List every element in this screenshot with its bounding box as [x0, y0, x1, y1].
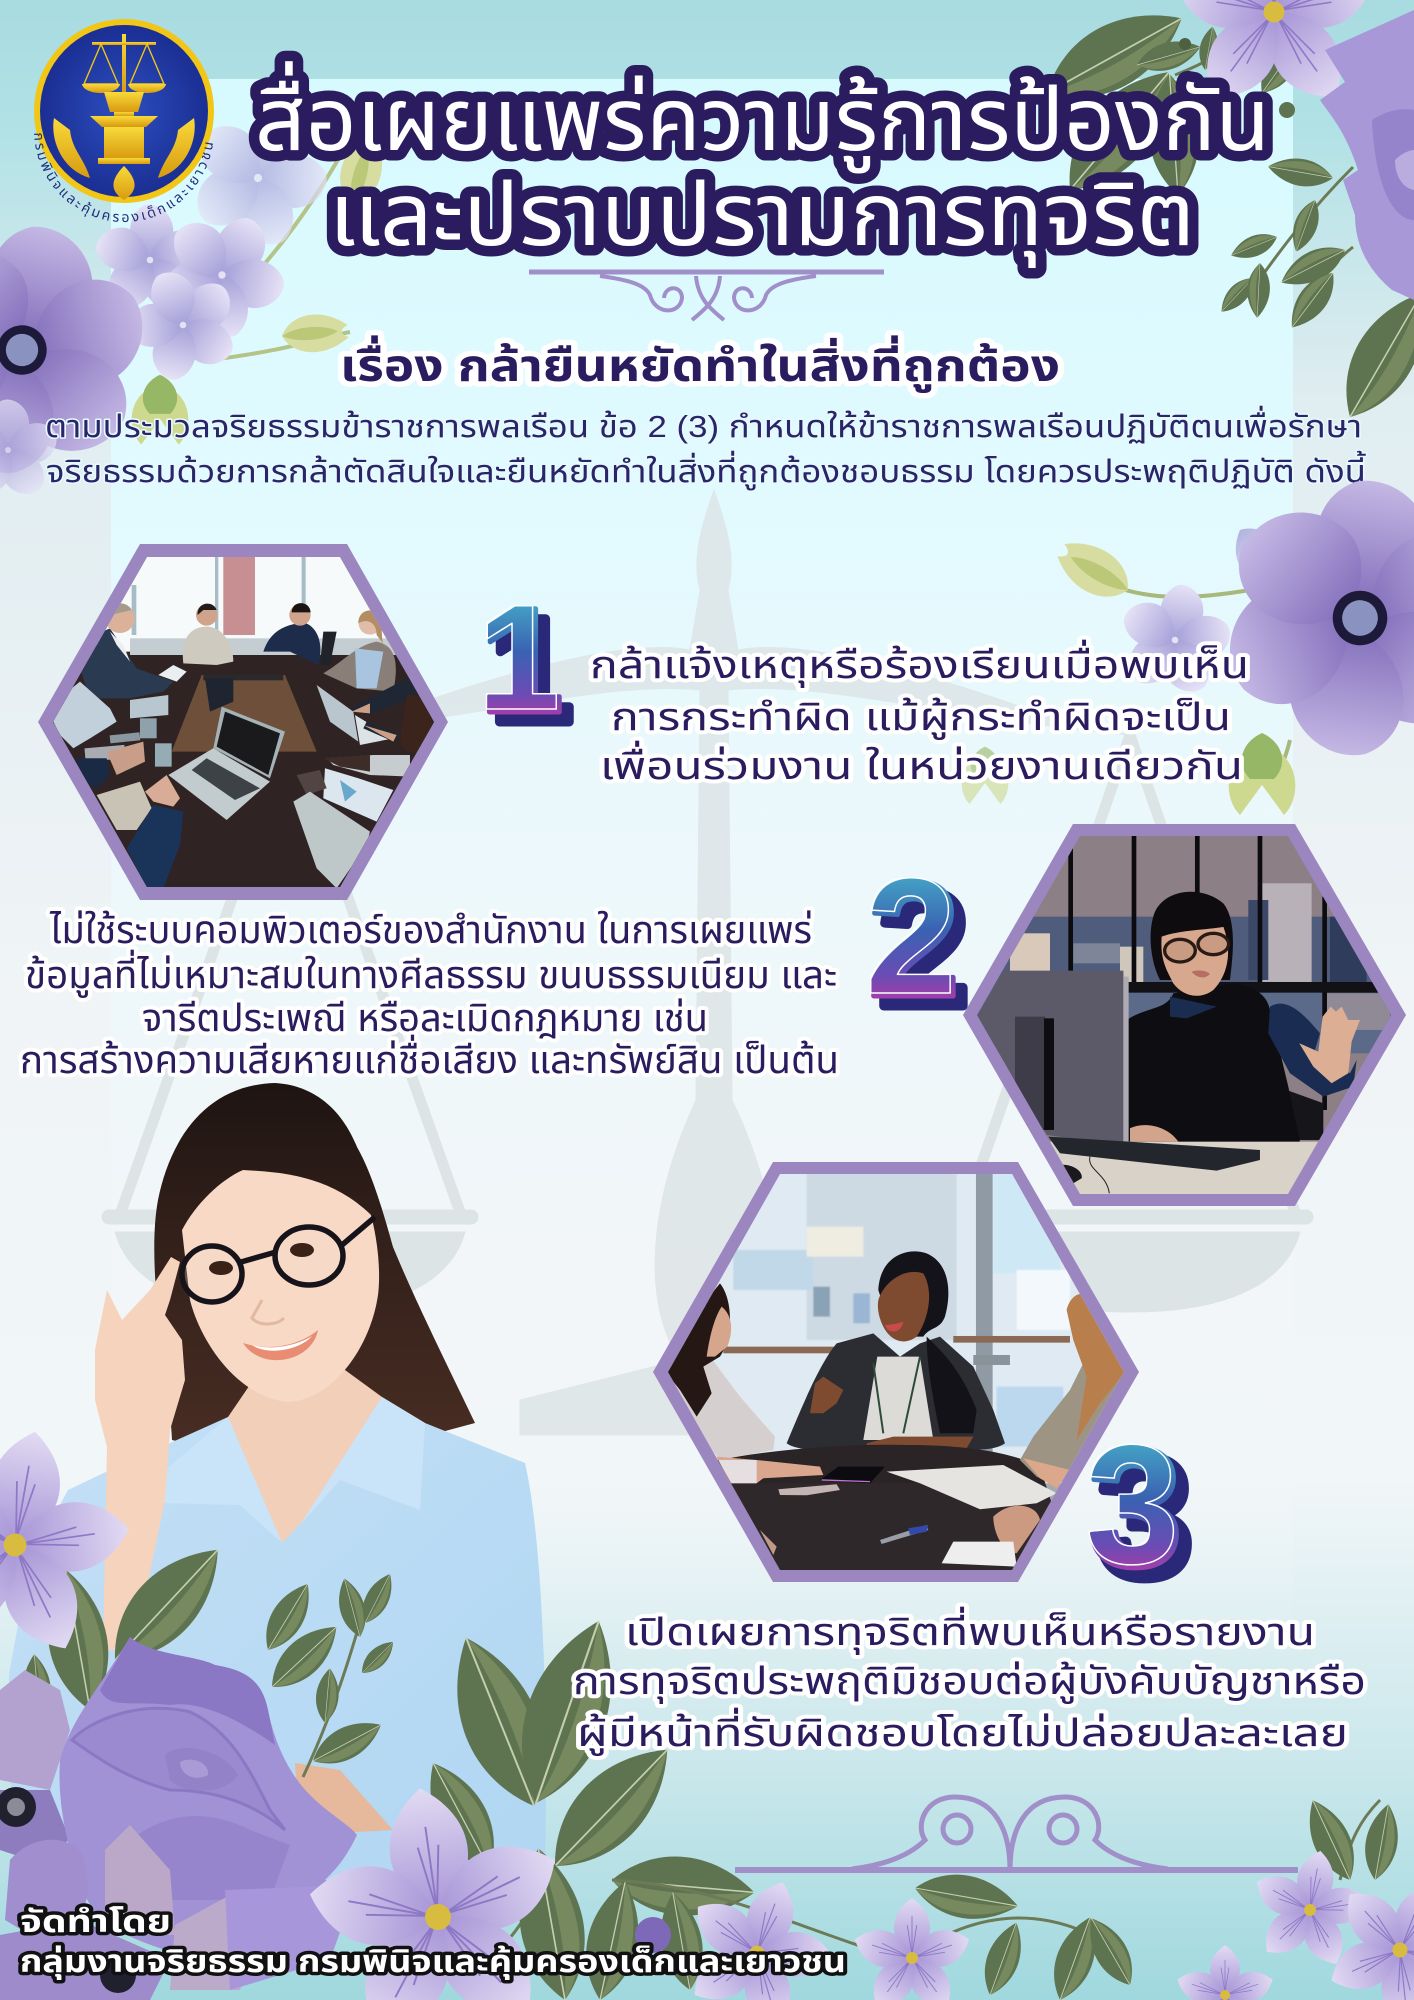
shirt collar [162, 1417, 282, 1543]
text block 2: ไม่ใช้ระบบคอมพิวเตอร์ของสำนักงาน ในการเผยแพร่ [49, 910, 812, 952]
watermark: scales of justice [102, 490, 1313, 1435]
monitor [977, 971, 1128, 1147]
left petals [0, 1670, 70, 1790]
number 1: 1 [480, 576, 563, 744]
text block 2: การสร้างความเสียหายแก่ชื่อเสียง และทรัพย์สิน เป็นต้น [20, 1034, 839, 1082]
anemone centre lower [100, 1957, 136, 1993]
decoration: top-right flowers and leaves [1032, 0, 1414, 432]
title: สื่อเผยแพร่ความรู้การป้องกัน [255, 61, 1270, 173]
left hands and sleeves [77, 758, 110, 788]
number 1: 1 [490, 586, 573, 754]
hair [154, 1083, 475, 1470]
text block 2: จารีตประเพณี หรือละเมิดกฎหมาย เช่น [142, 998, 708, 1040]
right laptop and man [317, 685, 358, 742]
right cuff and wrist [295, 1763, 393, 1835]
center woman [878, 1251, 948, 1337]
table [717, 1445, 1073, 1570]
text block 3 [573, 1606, 1366, 1756]
text block 3: เปิดเผยการทุจริตที่พบเห็นหรือรายงาน [625, 1606, 1315, 1655]
logo emblem: scales and pedestal [53, 34, 195, 200]
head [1151, 892, 1233, 980]
footer credit: จัดทำโดย [20, 1904, 171, 1939]
decoration: bottom-left leaves and roses [0, 1411, 757, 2000]
desk [1027, 1142, 1360, 1220]
laptop [213, 707, 285, 778]
text block 3: การทุจริตประพฤติมิชอบต่อผู้บังคับบัญชาหรือ [573, 1661, 1366, 1704]
footer credit: กลุ่มงานจริยธรรม กรมพินิจและคุ้มครองเด็กและเยาวชน [20, 1944, 846, 1980]
logo: กรมพินิจและคุ้มครองเด็กและเยาวชน [34, 133, 213, 222]
number 2: 2 [878, 857, 970, 1041]
keyboard [1048, 1137, 1260, 1171]
decoration: top-left flowers [0, 89, 390, 503]
decoration: bottom row flowers [612, 1793, 1414, 2000]
ornament: top divider [529, 272, 884, 320]
right woman [1020, 1363, 1127, 1487]
anemone centre [0, 1787, 36, 1827]
subtitle: เรื่อง กล้ายืนหยัดทำในสิ่งที่ถูกต้อง [340, 335, 1060, 393]
person: woman with glasses [9, 1083, 546, 1900]
text block 1: การกระทำผิด แม้ผู้กระทำผิดจะเป็น [611, 697, 1231, 740]
number 2: 2 [868, 847, 960, 1031]
neck and chest [228, 1370, 382, 1543]
decoration: right middle flowers [962, 461, 1414, 815]
logo [34, 19, 214, 222]
left man [80, 628, 173, 698]
number 2: 2 [865, 844, 957, 1028]
number 1: 1 [477, 573, 560, 741]
intro paragraph: ตามประมวลจริยธรรมข้าราชการพลเรือน ข้อ 2 (3) กำหนดให้ข้าราชการพลเรือนปฏิบัติตนเพื่อรักษา [45, 405, 1362, 444]
number 3: 3 [1085, 1410, 1180, 1600]
hand [1299, 1007, 1360, 1083]
intro paragraph: จริยธรรมด้วยการกล้าตัดสินใจและยืนหยัดทำในสิ่งที่ถูกต้องชอบธรรม โดยควรประพฤติปฏิบัติ ดังนี้ [46, 450, 1366, 490]
shirt [9, 1397, 546, 1900]
large rose [0, 1637, 365, 2000]
text block 2 [20, 910, 839, 1082]
hand raising glasses [95, 1257, 185, 1650]
intro paragraph [45, 405, 1366, 490]
ornament: bottom divider [735, 1797, 1298, 1870]
title: และปราบปรามการทุจริต [329, 165, 1195, 268]
text block 1: เพื่อนร่วมงาน ในหน่วยงานเดียวกัน [600, 740, 1243, 788]
white docs [158, 665, 187, 682]
footer credit [20, 1904, 846, 1980]
title [255, 61, 1270, 268]
body [1127, 983, 1300, 1142]
photo panel 3: women at meeting table [640, 1150, 1160, 1617]
left woman [668, 1287, 775, 1460]
photo panel 1: meeting room [30, 535, 463, 902]
back row people [183, 627, 233, 665]
text block 2: ข้อมูลที่ไม่เหมาะสมในทางศีลธรรม ขนบธรรมเนียม และ [25, 949, 837, 998]
text block 1 [590, 639, 1249, 788]
number 3: 3 [1098, 1423, 1193, 1613]
glasses [182, 1217, 375, 1302]
number 3: 3 [1088, 1413, 1183, 1603]
text block 1: กล้าแจ้งเหตุหรือร้องเรียนเมื่อพบเห็น [590, 639, 1249, 688]
photo panel 2: woman refusing at computer [960, 820, 1414, 1220]
text block 3: ผู้มีหน้าที่รับผิดชอบโดยไม่ปล่อยปละละเลย [577, 1707, 1348, 1756]
face [182, 1170, 379, 1402]
